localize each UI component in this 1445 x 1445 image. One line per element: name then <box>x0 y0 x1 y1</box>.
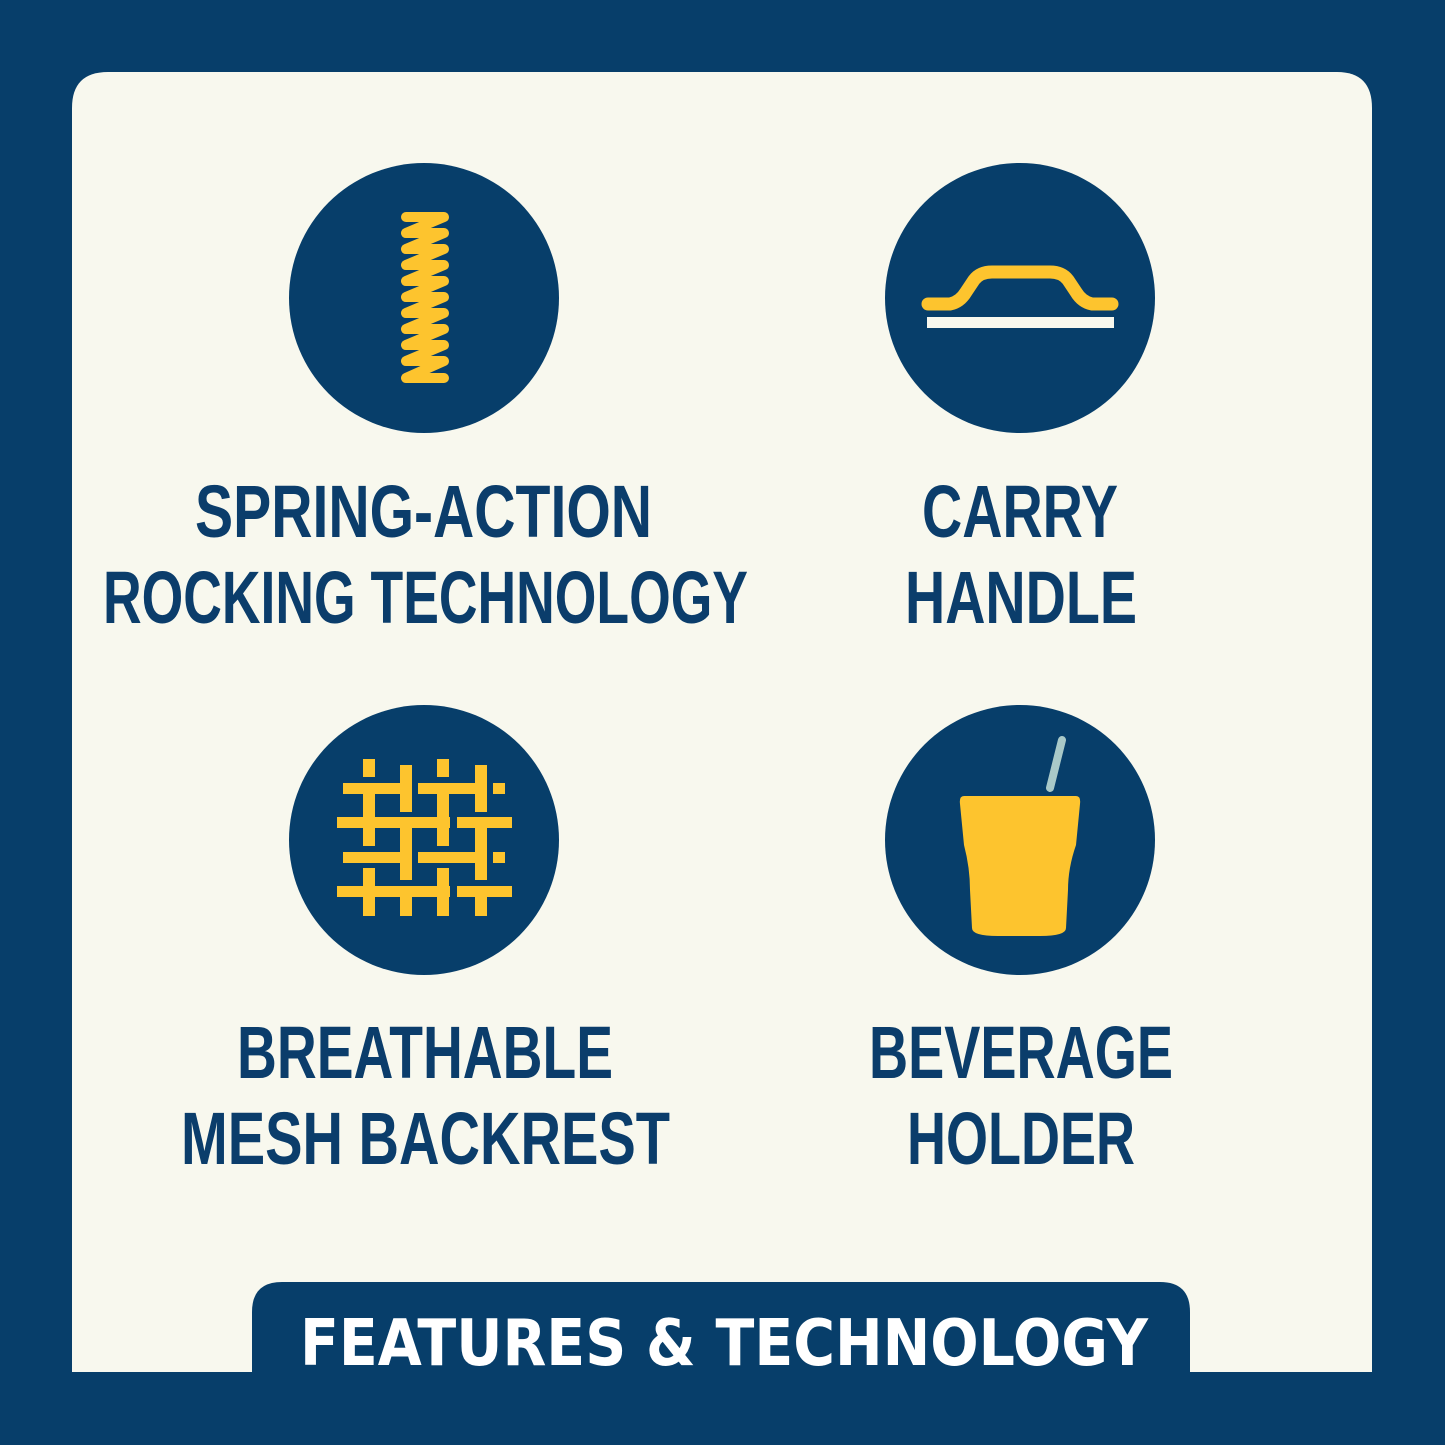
text: beverage holder: BEVERAGE <box>869 1011 1173 1094</box>
text: breathable mesh <box>181 1011 670 1180</box>
title tab: features & technology <box>252 1282 1190 1381</box>
text: beverage holder: HOLDER <box>907 1097 1135 1180</box>
text: carry handle: CARRY <box>922 470 1118 553</box>
icon: mesh <box>289 705 559 975</box>
icon: carry handle <box>885 163 1155 433</box>
icon: spring <box>289 163 559 433</box>
text: carry handle: HANDLE <box>905 556 1137 639</box>
text: spring-action: SPRING-ACTION <box>195 470 652 553</box>
icon: beverage cup <box>885 705 1155 975</box>
text: breathable mesh: MESH BACKREST <box>181 1097 670 1180</box>
text: beverage holder <box>869 1011 1173 1180</box>
title tab: features & technology: FEATURES & TECHNOLOGY <box>300 1307 1149 1381</box>
text: carry handle <box>905 470 1137 639</box>
text: breathable mesh: BREATHABLE <box>237 1011 613 1094</box>
text: spring-action: ROCKING TECHNOLOGY <box>103 556 748 639</box>
text: spring-action <box>103 470 748 639</box>
